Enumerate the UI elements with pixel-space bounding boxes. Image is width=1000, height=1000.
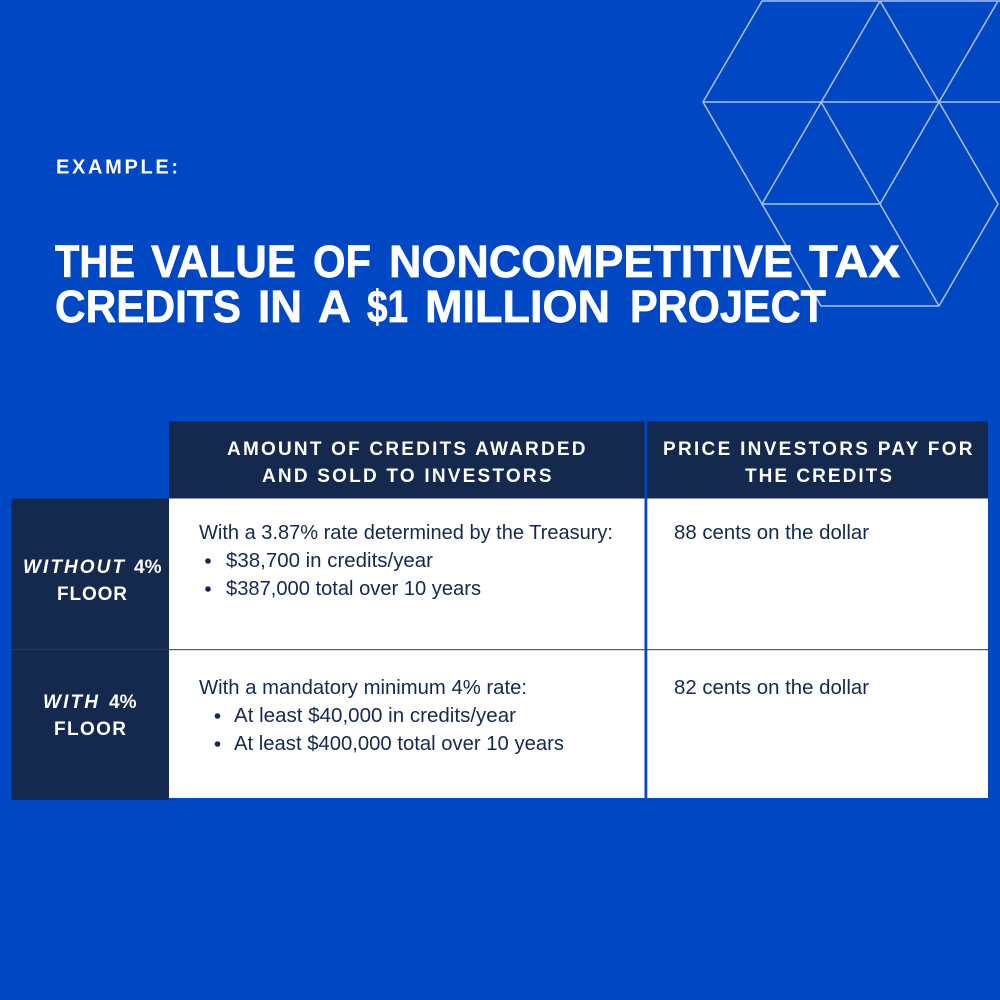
title: MILLION (425, 281, 610, 332)
cell: credits with floor: At least $40,000 in credits/year (234, 704, 516, 727)
row header: without 4% floor: WITHOUT (23, 557, 125, 578)
cell: price with floor: 82 cents on the dollar (674, 676, 869, 699)
column header: amount of credits: AND SOLD TO INVESTORS (262, 466, 552, 487)
title: OF (313, 236, 371, 287)
title: A (318, 281, 351, 332)
title: NONCOMPETITIVE (389, 236, 793, 287)
title: CREDITS (55, 281, 241, 332)
title: PROJECT (630, 281, 826, 332)
row header: without 4% floor (12, 498, 169, 650)
row header: with 4% floor: 4% (109, 692, 137, 713)
cell: credits with floor: At least $400,000 total over 10 years (234, 732, 564, 755)
title (55, 236, 900, 332)
cell: credits with floor: With a mandatory minimum 4% rate: (199, 676, 527, 699)
column header: price investors pay (647, 422, 988, 498)
comparison table (12, 422, 988, 800)
row header: with 4% floor (12, 650, 169, 800)
cell: credits without floor: $387,000 total over 10 years (226, 577, 481, 600)
cell: credits without floor: $38,700 in credits/year (226, 549, 433, 572)
title: THE (55, 236, 135, 287)
row header: without 4% floor: FLOOR (57, 584, 127, 605)
cell: price without floor: 88 cents on the dollar (674, 521, 869, 544)
cell: price without floor (647, 498, 988, 649)
cell: price with floor (647, 650, 988, 798)
cell: credits with floor (169, 650, 645, 798)
decorative hexagonal line pattern (703, 1, 1000, 306)
row header: with 4% floor: WITH (43, 692, 99, 713)
title: $1 (367, 281, 408, 332)
cell: credits without floor: With a 3.87% rate determined by the Treasury: (199, 521, 613, 544)
title: IN (258, 281, 302, 332)
row header: with 4% floor: FLOOR (54, 719, 126, 740)
column header: price investors pay: PRICE INVESTORS PAY FOR (663, 439, 973, 460)
row header: without 4% floor: 4% (134, 557, 162, 578)
cell: credits without floor (169, 498, 645, 649)
column header: price investors pay: THE CREDITS (745, 466, 892, 487)
title: TAX (809, 236, 900, 287)
eyebrow label: EXAMPLE: (56, 156, 178, 178)
column header: amount of credits: AMOUNT OF CREDITS AWARDED (227, 439, 586, 460)
column header: amount of credits (169, 422, 645, 498)
title: VALUE (151, 236, 296, 287)
